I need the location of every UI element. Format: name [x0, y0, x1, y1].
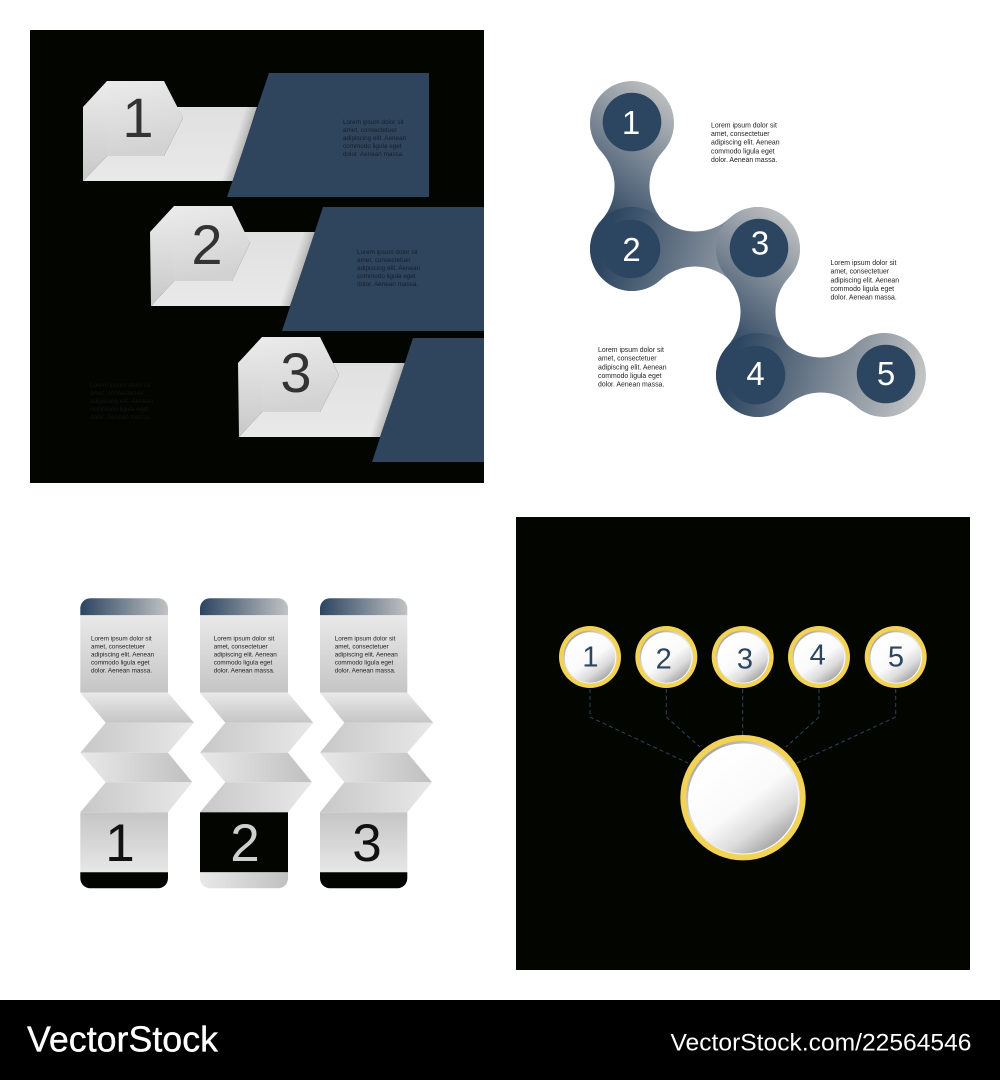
text block 1: Lorem ipsum dolor sit [343, 119, 404, 126]
node 5: 5 [877, 355, 895, 392]
text block C: dolor. Aenean massa. [598, 382, 664, 389]
circle 3 [712, 626, 774, 688]
text block B [830, 260, 899, 302]
circle 3: 3 [737, 644, 753, 676]
ribbon 1: Lorem ipsum dolor sit [91, 636, 152, 642]
text block 2: commodo ligula eget [357, 273, 416, 280]
text block B: dolor. Aenean massa. [830, 295, 897, 302]
text block 2: amet, consectetuer [357, 257, 411, 264]
text block B: commodo ligula eget [830, 286, 894, 293]
node 4 [727, 346, 785, 404]
ribbon 3: dolor. Aenean massa. [335, 668, 396, 674]
text block C: amet, consectetuer [598, 356, 657, 363]
node 5 [857, 345, 915, 403]
text block B: Lorem ipsum dolor sit [830, 260, 896, 267]
text block 3: dolor. Aenean massa. [90, 414, 151, 421]
ribbon 2: adipiscing elit. Aenean [214, 652, 277, 658]
ribbon 3: adipiscing elit. Aenean [335, 652, 398, 658]
panel background [516, 517, 970, 970]
circle 1: 1 [582, 642, 599, 674]
ribbon 2: commodo ligula eget [214, 660, 272, 666]
ribbon 1: amet, consectetuer [91, 644, 145, 650]
node 3: 3 [751, 224, 769, 262]
tab 1: 1 [122, 86, 154, 149]
tab 1 [83, 81, 257, 181]
panel: hub and spoke circles [516, 517, 970, 970]
text block A: commodo ligula eget [711, 148, 775, 155]
node 1: 1 [622, 104, 640, 141]
text block 1: commodo ligula eget [343, 143, 402, 150]
link 2 to 3 [590, 207, 800, 291]
text block 3 [90, 382, 154, 421]
ribbon 3 [320, 598, 433, 888]
tab 3: 3 [280, 341, 312, 404]
text block 1 [343, 119, 407, 158]
text block 2 [357, 249, 421, 288]
text block 2: dolor. Aenean massa. [357, 281, 418, 288]
text block A [711, 122, 780, 164]
text block B: adipiscing elit. Aenean [830, 277, 899, 284]
text block A: Lorem ipsum dolor sit [711, 122, 777, 130]
link 4 to 5 [716, 333, 926, 417]
text block 1: dolor. Aenean massa. [343, 151, 404, 158]
tab 3 [238, 337, 405, 437]
panel: folded ribbons [80, 598, 433, 888]
link 3 to 4 [716, 207, 800, 417]
panel: folder tabs on black [30, 30, 484, 483]
dashed connectors [590, 689, 896, 763]
text block 2: adipiscing elit. Aenean [357, 265, 421, 272]
ribbon 1: dolor. Aenean massa. [91, 668, 152, 674]
node 2: 2 [622, 231, 641, 268]
text block 1: amet, consectetuer [343, 127, 397, 134]
blue panel 1 [227, 73, 429, 197]
circle 2: 2 [656, 644, 672, 676]
text block A: dolor. Aenean massa. [711, 157, 777, 164]
ribbon 1 [80, 598, 194, 888]
panel background [30, 30, 484, 483]
footer bar [0, 1000, 1000, 1080]
circle 2 [635, 626, 697, 688]
text block C: Lorem ipsum dolor sit [598, 347, 664, 354]
ribbon 3: amet, consectetuer [335, 644, 389, 650]
link 1 to 2 [590, 81, 674, 291]
text block 2: Lorem ipsum dolor sit [357, 249, 418, 256]
text block 3: commodo ligula eget [90, 406, 149, 413]
ribbon 2: dolor. Aenean massa. [214, 668, 275, 674]
text block 3: Lorem ipsum dolor sit [90, 382, 151, 389]
text block 3: adipiscing elit. Aenean [90, 398, 154, 405]
tab 2: 2 [191, 213, 223, 276]
node 3 [730, 219, 788, 277]
text block C [598, 347, 667, 389]
text block C: adipiscing elit. Aenean [598, 364, 667, 371]
text block 1: adipiscing elit. Aenean [343, 135, 407, 142]
node 1 [603, 93, 661, 151]
ribbon 2: Lorem ipsum dolor sit [214, 636, 275, 642]
text block A: adipiscing elit. Aenean [711, 140, 780, 147]
circle 4 [788, 626, 850, 688]
ribbon 2: 2 [230, 814, 260, 873]
text block C: commodo ligula eget [598, 373, 662, 380]
ribbon 3: Lorem ipsum dolor sit [335, 636, 396, 642]
ribbon 3: commodo ligula eget [335, 660, 393, 666]
text block A: amet, consectetuer [711, 131, 770, 138]
circle 1 [559, 626, 621, 688]
circle 5: 5 [888, 642, 904, 674]
blue panel 3 [372, 338, 484, 462]
image url: VectorStock.com/22564546 [670, 1030, 972, 1056]
tab 2 [150, 206, 315, 306]
node 4: 4 [746, 355, 765, 392]
circle 4: 4 [810, 640, 826, 672]
ribbon 1: adipiscing elit. Aenean [91, 652, 155, 658]
circle 5 [865, 626, 927, 688]
ribbon 1: commodo ligula eget [91, 660, 150, 666]
brand name: VectorStock [27, 1018, 219, 1060]
ribbon 2 [200, 598, 313, 888]
ribbon 3: 3 [352, 814, 382, 873]
text block 3: amet, consectetuer [90, 390, 144, 397]
blue panel 2 [282, 207, 484, 331]
ribbon 1: 1 [105, 814, 135, 873]
ribbon 2: amet, consectetuer [214, 644, 268, 650]
hub circle [680, 735, 806, 860]
panel: metaball chain [590, 81, 926, 417]
text block B: amet, consectetuer [830, 269, 890, 276]
node 2 [602, 220, 660, 278]
